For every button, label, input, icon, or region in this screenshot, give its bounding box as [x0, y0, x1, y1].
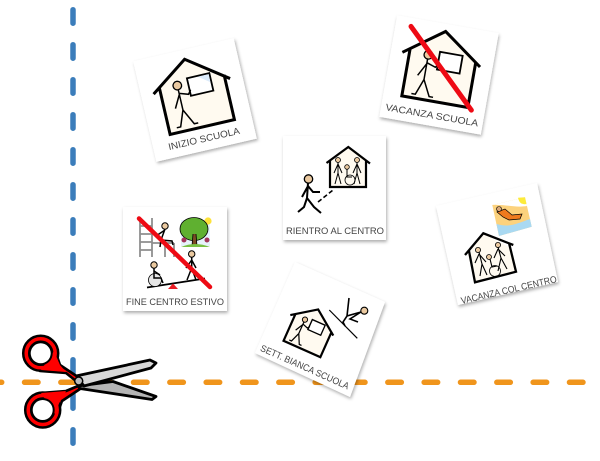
label: VACANZA COL CENTRO — [460, 274, 558, 307]
red cross-out stroke — [399, 26, 484, 110]
card: settimana bianca scuola — [255, 262, 385, 397]
card: vacanza col centro — [436, 183, 558, 307]
icon: house with person at board — [148, 50, 239, 136]
icon: beach scene — [492, 197, 532, 236]
label: SETT. BIANCA SCUOLA — [258, 343, 351, 393]
label: INIZIO SCUOLA — [167, 126, 242, 153]
icon: house with person at board — [280, 300, 340, 358]
top handle — [26, 338, 78, 381]
card: inizio scuola — [133, 38, 257, 162]
icon: house with person at board — [395, 25, 485, 108]
vertical blue dashed cut line — [70, 10, 76, 461]
icon: climbing frame with child — [140, 218, 174, 257]
icon: walking person with dashed path — [298, 175, 333, 213]
card: fine centro estivo — [123, 207, 227, 311]
pivot screw — [75, 377, 83, 385]
icon: house with group of people — [465, 233, 516, 282]
label: VACANZA SCUOLA — [385, 102, 480, 130]
icon: seesaw with two people — [147, 251, 205, 289]
card: rientro al centro — [283, 136, 386, 240]
upper blade — [76, 360, 156, 386]
bottom handle — [28, 386, 80, 425]
icon: tree with sun — [180, 217, 212, 247]
lower blade — [78, 382, 156, 400]
red cross-out stroke — [139, 218, 210, 287]
icon: house with group of people — [326, 147, 370, 187]
horizontal orange dashed cut line — [0, 380, 586, 385]
icon: skier — [329, 298, 368, 338]
label: RIENTRO AL CENTRO — [286, 226, 384, 237]
label: FINE CENTRO ESTIVO — [126, 297, 224, 308]
icon: scissors — [26, 338, 156, 425]
card: vacanza scuola — [379, 15, 499, 135]
